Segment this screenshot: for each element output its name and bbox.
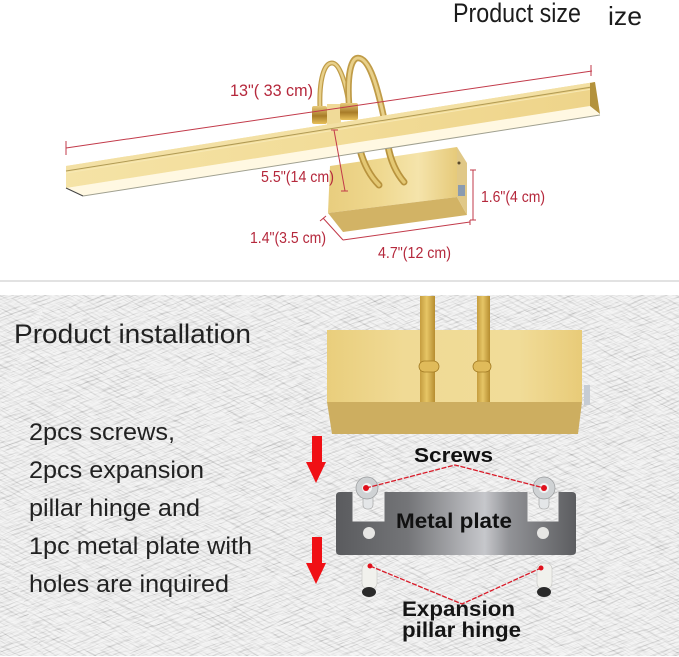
dimension labels xyxy=(230,81,545,262)
label: screws: Screws xyxy=(414,445,493,467)
label: expansion pillar hinge: pillar hinge xyxy=(402,619,521,642)
dimension labels: 1.6"(4 cm) xyxy=(481,189,545,206)
arrow: lower xyxy=(306,537,326,584)
screw: right xyxy=(533,477,555,509)
label: expansion pillar hinge xyxy=(402,598,521,642)
expansion pillar: right xyxy=(537,563,552,597)
arrow: upper xyxy=(306,436,326,483)
dimension labels: 5.5"(14 cm) xyxy=(261,169,334,186)
textured wall background xyxy=(0,295,679,656)
light bar xyxy=(66,82,600,196)
dimension lines xyxy=(66,65,592,240)
lamp arms: arcs xyxy=(320,58,384,118)
text block: parts list: 2pcs expansion xyxy=(29,457,204,484)
text block: parts list: pillar hinge and xyxy=(29,495,200,522)
heading fragment: ize: ize xyxy=(608,1,642,31)
text block: parts list: holes are inquired xyxy=(29,571,229,598)
metal plate xyxy=(336,492,576,555)
heading: product installation: Product installation xyxy=(14,319,251,349)
screw: left xyxy=(356,477,378,509)
wall mount box xyxy=(328,146,467,232)
wall mount box, front view xyxy=(327,296,590,434)
panel: product size xyxy=(0,0,679,280)
label: expansion pillar hinge: Expansion xyxy=(402,598,515,621)
text block: parts list xyxy=(29,419,252,598)
plate label: Metal plate xyxy=(396,510,512,533)
pivot collars xyxy=(312,103,358,128)
text block: parts list: 2pcs screws, xyxy=(29,419,175,446)
red callout leaders xyxy=(366,465,544,604)
text block: parts list: 1pc metal plate with xyxy=(29,533,252,560)
panel: product installation xyxy=(0,295,679,656)
dimension labels: 1.4"(3.5 cm) xyxy=(250,230,326,247)
callout dots xyxy=(363,485,547,570)
dimension labels: 13"( 33 cm) xyxy=(230,81,313,100)
expansion pillar: left xyxy=(362,563,377,597)
dimension labels: 4.7"(12 cm) xyxy=(378,245,451,262)
